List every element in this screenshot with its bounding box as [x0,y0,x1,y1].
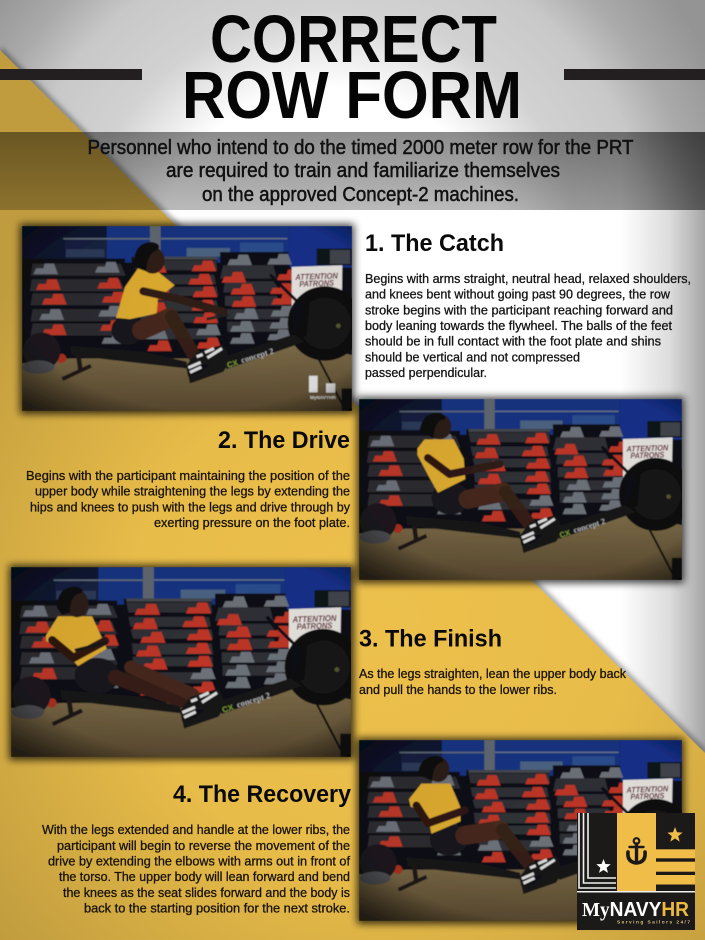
sign text: PATRONS [630,791,665,802]
rower: finish position [46,587,223,721]
rank stripes [656,849,695,884]
body 1: body leaning towards the flywheel. The balls of the feet [365,319,673,333]
icon: white star [596,859,611,873]
watermark logo [309,376,336,400]
rower: drive position [417,413,560,545]
heading 1: 1. The Catch [365,230,504,257]
sign text [625,784,668,802]
photo 4: the recovery [359,740,682,921]
body 4 [42,823,351,916]
sign text: ATTENTION [291,613,337,624]
body 4: back to the starting position for the next stroke. [84,902,350,916]
rower: recovery position [409,756,560,886]
sign text [291,613,337,631]
body 2: upper body while straightening the legs by extending the [35,485,350,499]
section 1: the catch [365,230,691,380]
band: intro [0,132,705,210]
body 4: participant will begin to reverse the movement of the [57,839,350,853]
body 4: the torso. The upper body will lean forward and bend [59,870,350,884]
intro text: are required to train and familiarize themselves [166,160,560,182]
section 2: the drive [26,427,351,530]
sign text: ATTENTION [625,443,668,454]
photo shadows [9,224,684,924]
body 2 [26,469,351,530]
sign text: PATRONS [299,278,334,289]
machine label: CX [221,703,235,715]
intro text: Personnel who intend to do the timed 2000 meter row for the PRT [88,137,634,159]
machine label [221,690,272,715]
sign text [294,270,339,289]
body 1 [365,272,691,380]
machine label: concept 2 [240,347,275,365]
machine label: CX [226,358,240,370]
heading 2: 2. The Drive [218,427,350,454]
body 3: and pull the hands to the lower ribs. [359,683,557,697]
body 1: should be vertical and not compressed [365,350,580,364]
title: ROW FORM [182,58,522,133]
body 1: stroke begins with the participant reaching forward and [365,303,673,317]
sign text: ATTENTION [294,270,339,282]
decorative bar right [564,69,705,80]
rower: catch position [111,242,228,376]
photo 2: the drive [359,399,682,580]
sign text: PATRONS [630,450,665,461]
logo: MyNavyHR [577,813,695,930]
title [182,2,522,133]
intro text: on the approved Concept-2 machines. [202,184,519,206]
body 2: Begins with the participant maintaining the position of the [26,469,350,483]
watermark logo: MyNAVYHR [310,395,336,400]
heading 4: 4. The Recovery [173,781,351,808]
tagline: Serving Sailors 24/7 [617,920,690,926]
body 3: As the legs straighten, lean the upper body back [359,667,627,681]
body 1: Begins with arms straight, neutral head, relaxed shoulders, [365,272,691,286]
heading 3: 3. The Finish [359,626,502,652]
title: CORRECT [210,2,497,77]
wordmark: MyNAVYHR [582,899,690,921]
icon: gold star [667,827,683,842]
body 1: should be in full contact with the foot plate and shins [365,335,661,349]
icon: anchor [628,838,645,863]
machine label: concept 2 [572,517,606,535]
decorative bar left [0,69,142,80]
section 4: the recovery [42,781,351,916]
left chevrons [579,813,616,888]
body 3 [359,667,627,697]
body 4: the knees as the seat slides forward and the body is [63,886,350,900]
body 1: passed perpendicular. [365,366,487,380]
body 4: With the legs extended and handle at the lower ribs, the [42,823,350,837]
body 2: hips and knees to push with the legs and drive through by [30,500,351,514]
section 3: the finish [359,626,627,697]
sign text: PATRONS [296,620,333,631]
body 2: exerting pressure on the foot plate. [154,516,350,530]
photo 3: the finish [11,567,351,757]
machine label: concept 2 [235,690,271,710]
body 4: drive by extending the elbows with arms out in front of [48,854,351,868]
intro text [88,137,634,206]
machine label: CX [558,528,572,540]
sign text [625,443,668,461]
machine label [226,347,275,370]
photo 1: the catch [22,226,352,411]
machine label [558,517,606,540]
sign text: ATTENTION [625,784,668,795]
body 1: and knees bent without going past 90 degrees, the row [365,288,671,302]
